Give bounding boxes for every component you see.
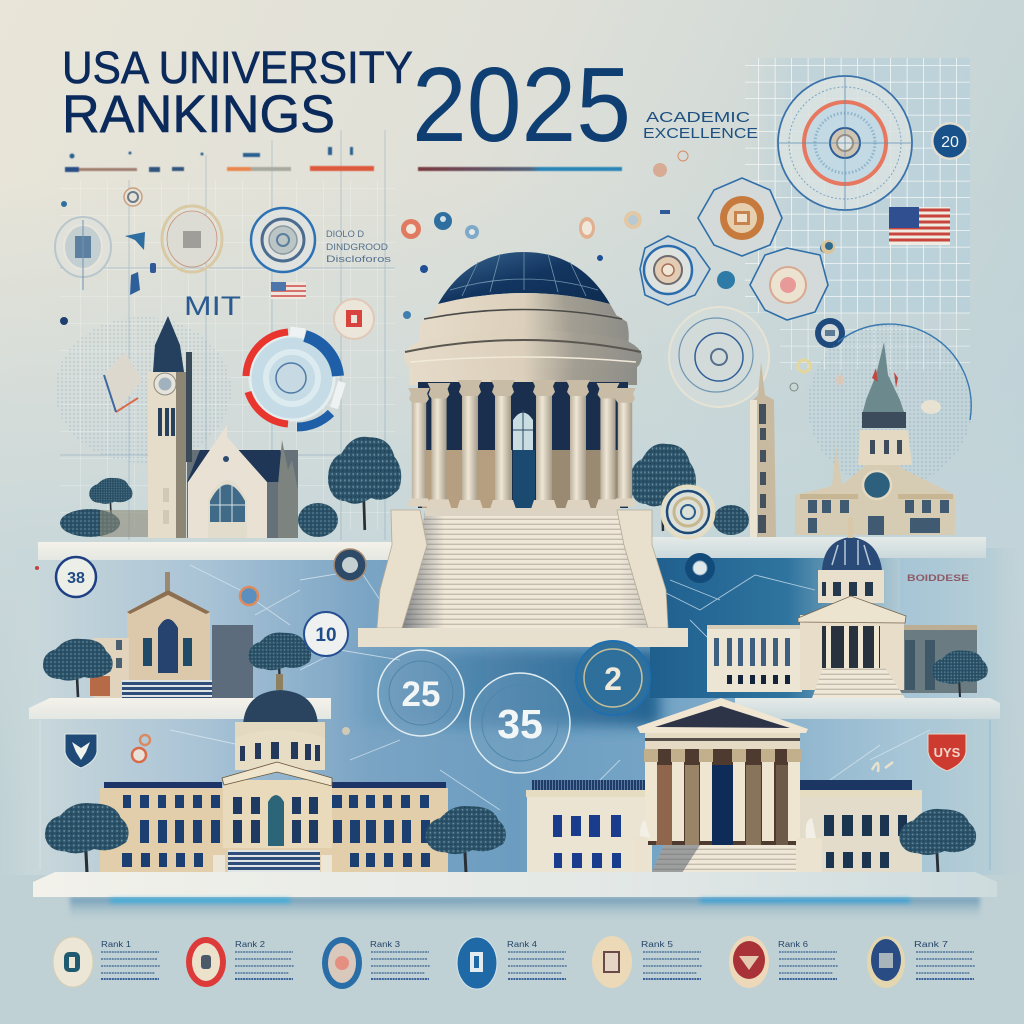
subtitle: academic excellence: EXCELLENCE	[643, 125, 758, 142]
badge: left seal	[55, 217, 111, 290]
rotunda plinth	[358, 628, 688, 647]
upper left background trees	[60, 437, 401, 537]
legend item 4: Rank 4	[507, 940, 538, 949]
caption beside seal: Discloforos	[326, 254, 391, 265]
subtitle: academic excellence	[643, 110, 758, 142]
badge: 20	[931, 122, 969, 160]
small accents lower band	[132, 727, 893, 772]
legend item 1	[53, 937, 160, 987]
shield: red: UYS	[934, 745, 961, 760]
title	[62, 42, 413, 144]
network lines on blue band	[40, 565, 990, 870]
header rule	[65, 147, 622, 172]
number bubble 25: 25	[402, 675, 440, 714]
target dial chart	[778, 76, 912, 210]
building: cathedral	[795, 342, 955, 535]
dotted sphere right	[808, 323, 972, 487]
number bubble 2: 2	[604, 661, 622, 697]
small badge	[685, 553, 715, 583]
legend item 7: Rank 7	[914, 940, 949, 949]
badge: 38: 38	[67, 570, 85, 587]
badge: 38	[56, 557, 96, 597]
drum	[419, 293, 629, 346]
caption beside seal	[326, 229, 391, 265]
number bubble 2	[576, 641, 650, 715]
title: RANKINGS	[62, 85, 335, 144]
entablature	[404, 330, 642, 385]
year 2025: 2025	[412, 46, 631, 164]
legend item 4	[457, 937, 567, 989]
legend item 2	[186, 937, 294, 987]
middle shelf right	[735, 698, 1000, 719]
badge: cream seal	[162, 206, 222, 272]
grand staircase	[400, 508, 648, 628]
subtitle: academic excellence: ACADEMIC	[646, 110, 750, 126]
ring badge right of stairs	[662, 486, 714, 538]
title: USA UNIVERSITY	[62, 42, 413, 93]
colonnade	[407, 380, 637, 509]
legend item 6	[729, 936, 838, 988]
legend item 3	[322, 937, 430, 989]
lower shelf	[33, 872, 997, 902]
legend item 7	[867, 936, 975, 988]
upper right background trees	[630, 444, 749, 535]
legend item 3: Rank 3	[370, 940, 401, 949]
badge: red seal	[334, 299, 374, 339]
legend item 1: Rank 1	[101, 940, 132, 949]
badge: blue ring seal	[251, 208, 315, 272]
dome	[438, 252, 610, 304]
hexagon network	[640, 178, 835, 320]
number bubble 10	[304, 612, 348, 656]
level 3 left building	[45, 674, 506, 873]
badge: dark seal	[815, 318, 845, 348]
level 2 right capitol	[707, 518, 988, 698]
icon: american flag	[889, 207, 950, 245]
level 2 left building	[43, 572, 311, 698]
legend item 5: Rank 5	[641, 940, 674, 949]
central rotunda	[358, 252, 688, 647]
label: MIT: MIT	[184, 291, 241, 321]
legend item 5	[592, 936, 702, 988]
badge: orange ring	[240, 587, 258, 605]
shield: red	[928, 734, 966, 771]
number bubble 35	[470, 673, 570, 773]
small caption right: BOIDDESE	[907, 573, 969, 583]
scattered accent marks	[35, 151, 830, 570]
caption beside seal: DIOLO D	[326, 229, 364, 240]
concentric rings	[669, 307, 769, 407]
chart: donut	[246, 331, 342, 427]
legend item 6: Rank 6	[778, 940, 809, 949]
legend item 2: Rank 2	[235, 940, 266, 949]
dotted sphere left	[55, 317, 231, 463]
level 3 right temple	[526, 698, 976, 876]
building: distant tower	[750, 362, 776, 537]
badge: 20: 20	[941, 134, 959, 151]
upper shelf right	[640, 537, 986, 558]
building: gothic tower and chapel	[100, 316, 298, 538]
number bubble 35: 35	[497, 701, 543, 747]
portico interior	[418, 382, 628, 508]
middle shelf left	[29, 698, 331, 719]
caption beside seal: DINDGROOD	[326, 242, 388, 253]
number bubble 10: 10	[315, 625, 337, 646]
shield: navy	[65, 734, 97, 768]
stair wall right	[617, 510, 668, 628]
stair wall left	[377, 510, 427, 628]
badge: dark ring	[334, 549, 366, 581]
icon: small flag	[271, 282, 306, 299]
icon: small ring	[124, 188, 142, 206]
number bubble 25	[378, 650, 464, 736]
upper shelf left	[38, 542, 398, 560]
